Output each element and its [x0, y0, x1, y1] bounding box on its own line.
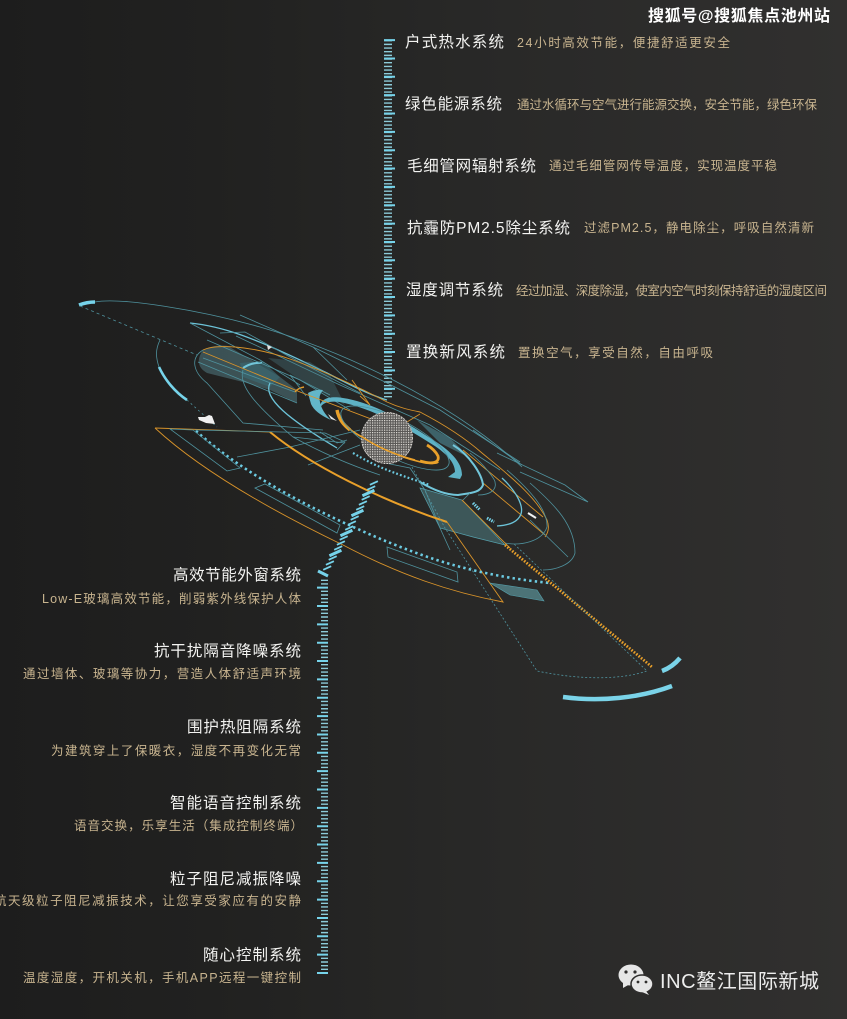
- feature: 粒子阻尼减振降噪: [0, 870, 301, 908]
- feature: 抗干扰隔音降噪系统: 抗干扰隔音降噪系统: [154, 642, 301, 660]
- feature: 绿色能源系统: 绿色能源系统: [405, 95, 502, 113]
- right side arcs: [333, 394, 588, 570]
- teal dashed cone to lower right arcs: [412, 467, 647, 678]
- feature: 置换新风系统: [406, 343, 713, 361]
- feature: 毛细管网辐射系统: 通过毛细管网传导温度，实现温度平稳: [549, 158, 777, 173]
- feature: 置换新风系统: 置换空气，享受自然，自由呼吸: [518, 345, 713, 360]
- feature: 围护热阻隔系统: 围护热阻隔系统: [187, 718, 301, 736]
- feature: 湿度调节系统: [406, 281, 827, 299]
- feature: 抗霾防PM2.5除尘系统: [407, 219, 814, 237]
- feature: 湿度调节系统: 湿度调节系统: [406, 281, 503, 299]
- lower right panel: [420, 488, 505, 545]
- large lower orange bracket: [155, 428, 503, 602]
- lower right cyan arc segments: [563, 658, 680, 699]
- central holographic disc graphic: [79, 301, 680, 699]
- bottom tick rail: [322, 579, 324, 974]
- teal line work: [190, 315, 520, 475]
- feature: 围护热阻隔系统: [51, 718, 301, 758]
- crescent highlights: [308, 390, 470, 479]
- feature: 湿度调节系统: 经过加湿、深度除湿，使室内空气时刻保持舒适的湿度区间: [516, 283, 827, 298]
- watermark: sohu source: 搜狐号@搜狐焦点池州站: [648, 6, 830, 25]
- orange line work: [203, 347, 548, 537]
- orange ring front of sphere: [361, 436, 415, 460]
- feature: 毛细管网辐射系统: [407, 157, 777, 175]
- feature: 智能语音控制系统: 语音交换，乐享生活（集成控制终端）: [74, 818, 303, 833]
- feature: 抗干扰隔音降噪系统: 通过墙体、玻璃等协力，营造人体舒适声环境: [23, 666, 301, 681]
- feature: 高效节能外窗系统: Low-E玻璃高效节能，削弱紫外线保护人体: [42, 591, 301, 606]
- feature: 随心控制系统: [23, 946, 301, 985]
- feature: 智能语音控制系统: [74, 794, 303, 833]
- dotted sphere: [361, 412, 413, 464]
- feature: 抗霾防PM2.5除尘系统: 过滤PM2.5，静电除尘，呼吸自然清新: [584, 220, 814, 235]
- top feature list: [405, 33, 827, 361]
- top tick rail: [388, 39, 390, 398]
- outer dashed sweep arcs, upper left: [79, 301, 522, 467]
- diagonal tick rail: [318, 481, 378, 576]
- feature: 户式热水系统: 户式热水系统: [405, 33, 504, 51]
- feature: 粒子阻尼减振降噪: 粒子阻尼减振降噪: [170, 870, 301, 888]
- feature: 随心控制系统: 随心控制系统: [203, 946, 301, 964]
- feature: 智能语音控制系统: 智能语音控制系统: [170, 794, 301, 812]
- watermark: account name: INC鳌江国际新城: [660, 970, 819, 993]
- feature: 户式热水系统: [405, 33, 730, 51]
- feature: 围护热阻隔系统: 为建筑穿上了保暖衣，湿度不再变化无常: [51, 743, 301, 758]
- feature: 毛细管网辐射系统: 毛细管网辐射系统: [407, 157, 536, 175]
- feature: 粒子阻尼减振降噪: 航天级粒子阻尼减振技术，让您享受家应有的安静: [0, 893, 301, 908]
- icon: wechat: [618, 964, 653, 995]
- feature: 高效节能外窗系统: 高效节能外窗系统: [173, 566, 301, 584]
- feature: 抗霾防PM2.5除尘系统: 抗霾防PM2.5除尘系统: [407, 219, 570, 237]
- feature: 绿色能源系统: [405, 95, 817, 113]
- feature: 户式热水系统: 24小时高效节能，便捷舒适更安全: [517, 35, 730, 50]
- bottom feature list: [0, 566, 303, 985]
- translucent tube: [198, 345, 304, 403]
- orange dotted ray: [462, 500, 652, 667]
- feature: 置换新风系统: 置换新风系统: [406, 343, 505, 361]
- feature: 高效节能外窗系统: [42, 566, 301, 606]
- cyan dotted arcs: [196, 431, 550, 583]
- feature: 绿色能源系统: 通过水循环与空气进行能源交换，安全节能，绿色环保: [517, 97, 817, 112]
- feature: 抗干扰隔音降噪系统: [23, 642, 301, 681]
- feature: 随心控制系统: 温度湿度，开机关机，手机APP远程一键控制: [23, 970, 301, 985]
- outlined panels on disc: [170, 429, 544, 601]
